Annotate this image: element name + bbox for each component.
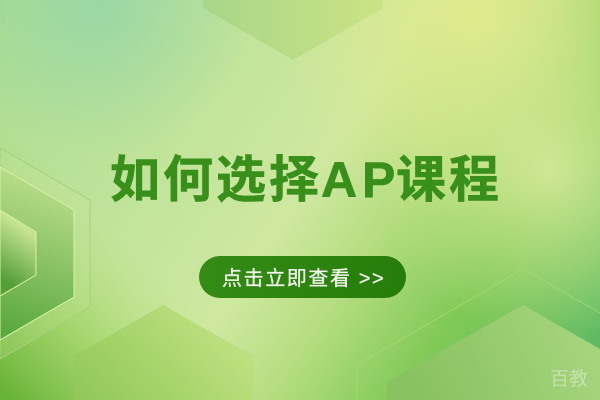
hexagon: left middle [0,167,74,340]
hexagon: left outer outline [0,148,90,359]
watermark: 百教 [550,368,588,390]
hexagon: bottom centre [74,305,253,400]
hexagons: left nested group [0,148,90,359]
hexagon: top centre [203,0,383,60]
hexagon: left inner [0,210,36,296]
button label: 点击立即查看 >> [222,267,385,290]
button [199,256,406,298]
hexagon: bottom-right filled [387,305,600,400]
hexagon: bottom-right outline [357,269,600,400]
hexagon: top-left corner outline [0,0,7,32]
title: 如何选择AP课程 [110,152,499,208]
